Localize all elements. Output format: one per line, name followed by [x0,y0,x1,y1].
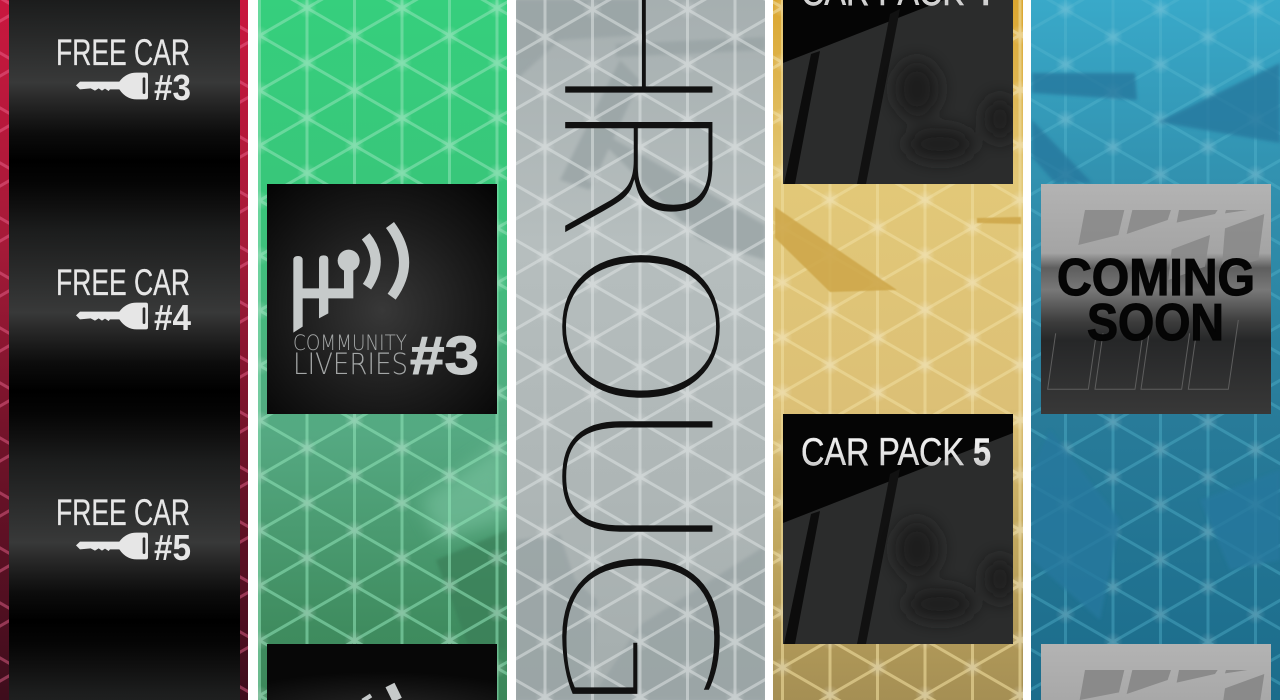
panel: green community liveries column [258,0,507,700]
free car 4 tile: #4 [154,297,191,338]
free car 5 tile [56,492,191,568]
free car 4 tile [56,262,191,338]
car pack 5 tile: CAR PACK 5 [801,431,991,474]
panel: teal coming soon column [1031,0,1280,700]
icon: shifter with signal arcs [293,225,404,333]
panel: red free car column [0,0,248,700]
free car 3 tile: #3 [154,67,191,108]
oversized word HROUG, thin black lettering [562,0,720,694]
panel: grey column with oversized lettering [516,0,765,700]
community liveries 3 tile: COMMUNITY [293,331,407,355]
coming soon tile, cropped [1041,644,1271,700]
community liveries 3 tile: LIVERIES [293,347,408,381]
free car 3 tile [56,32,191,108]
free car 3 tile: FREE CAR [56,32,190,73]
coming soon tile: SOON [1087,294,1224,352]
community liveries 4 tile, cropped [267,644,497,700]
community liveries 3 tile: #3 [410,326,479,386]
free car 5 tile: #5 [154,527,191,568]
coming soon tile: COMING [1057,249,1255,307]
community liveries 3 tile [267,184,497,414]
panel: gold car pack column [773,0,1023,700]
free car 5 tile: FREE CAR [56,492,190,533]
car pack 5 tile [783,414,1016,644]
icon: stripes logo [1048,210,1264,389]
free car 4 tile: FREE CAR [56,262,190,303]
car pack 4 tile, cropped [783,0,1016,184]
coming soon tile [1041,184,1271,414]
